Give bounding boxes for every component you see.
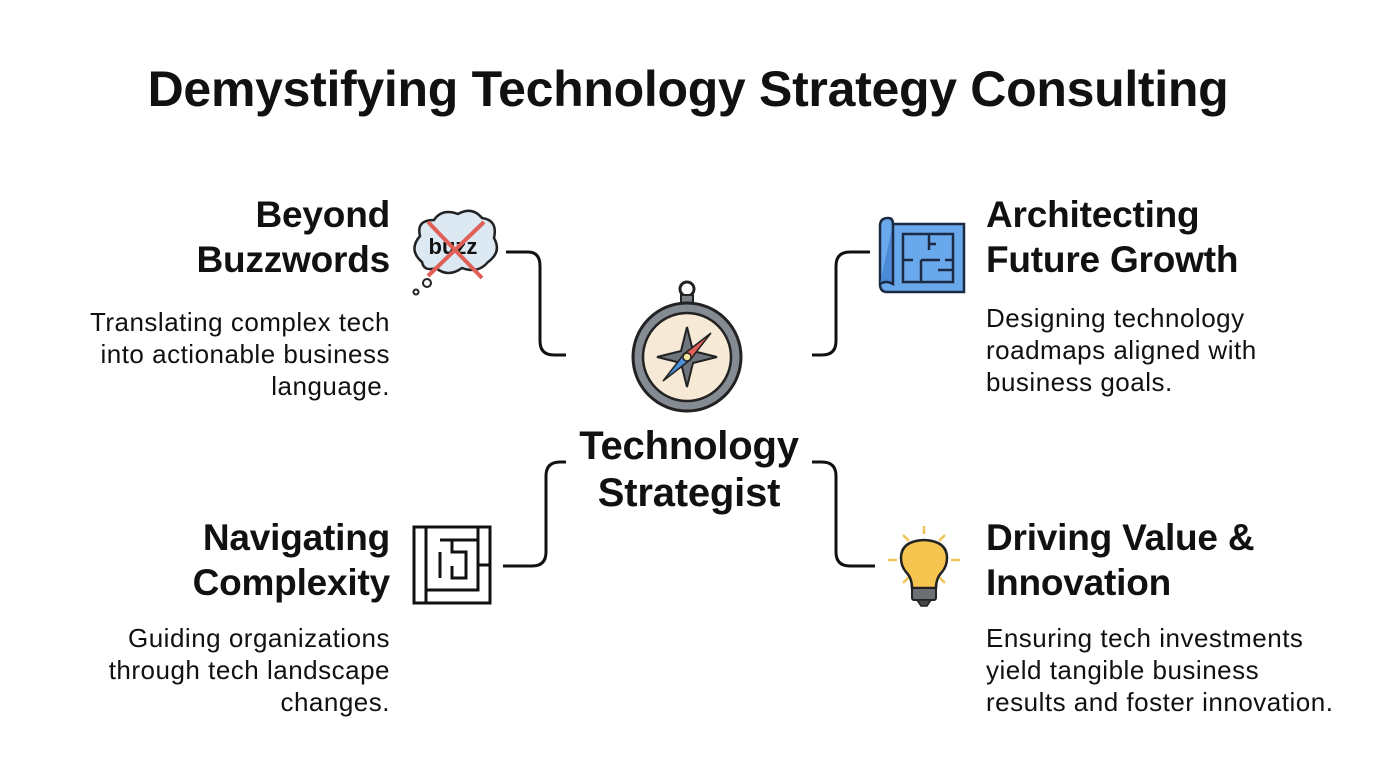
center label: Strategist (598, 471, 780, 515)
icon: compass (633, 282, 741, 411)
text: Architecting: Designing technology (986, 303, 1245, 333)
connector: top-left (506, 252, 566, 355)
text: Driving Value: yield tangible business (986, 655, 1259, 685)
heading: Driving Value (986, 517, 1254, 603)
icon: buzz cloud: buzz (429, 234, 477, 259)
center label: Technology (579, 424, 799, 468)
text: Navigating Complexity: through tech landscape (109, 655, 390, 685)
text: Beyond Buzzwords: into actionable business (100, 339, 390, 369)
heading: Navigating Complexity: Navigating (203, 517, 390, 558)
text: Driving Value: Ensuring tech investments (986, 623, 1303, 653)
heading: Architecting Future Growth: Future Growth (986, 239, 1238, 280)
heading: Driving Value: Driving Value & (986, 517, 1254, 558)
connector: bottom-left (503, 462, 566, 566)
icon: blueprint (880, 218, 964, 292)
text: Navigating Complexity: changes. (280, 687, 390, 717)
text: Driving Value: results and foster innovation. (986, 687, 1333, 717)
heading: Beyond Buzzwords: Buzzwords (197, 239, 390, 280)
heading: Architecting Future Growth (986, 194, 1238, 280)
icon: light bulb (888, 526, 960, 606)
heading: Navigating Complexity: Complexity (193, 562, 390, 603)
text: Beyond Buzzwords: language. (271, 371, 390, 401)
heading: Beyond Buzzwords (197, 194, 390, 280)
text: Architecting: business goals. (986, 367, 1173, 397)
text: Navigating Complexity (109, 623, 390, 717)
text: Beyond Buzzwords: Translating complex tech (90, 307, 390, 337)
title: Demystifying Technology Strategy Consulting (148, 61, 1228, 117)
text: Architecting: roadmaps aligned with (986, 335, 1257, 365)
icon: buzz cloud (414, 211, 497, 294)
text: Beyond Buzzwords (90, 307, 390, 401)
heading: Architecting Future Growth: Architecting (986, 194, 1199, 235)
connector: top-right (812, 252, 870, 355)
connector: bottom-right (812, 462, 875, 566)
heading: Navigating Complexity (193, 517, 390, 603)
heading: Driving Value: Innovation (986, 562, 1171, 603)
text: Architecting (986, 303, 1257, 397)
text: Navigating Complexity: Guiding organizations (128, 623, 390, 653)
heading: Beyond Buzzwords: Beyond (256, 194, 390, 235)
text: Driving Value (986, 623, 1333, 717)
center label (579, 424, 799, 515)
icon: maze (414, 527, 490, 603)
